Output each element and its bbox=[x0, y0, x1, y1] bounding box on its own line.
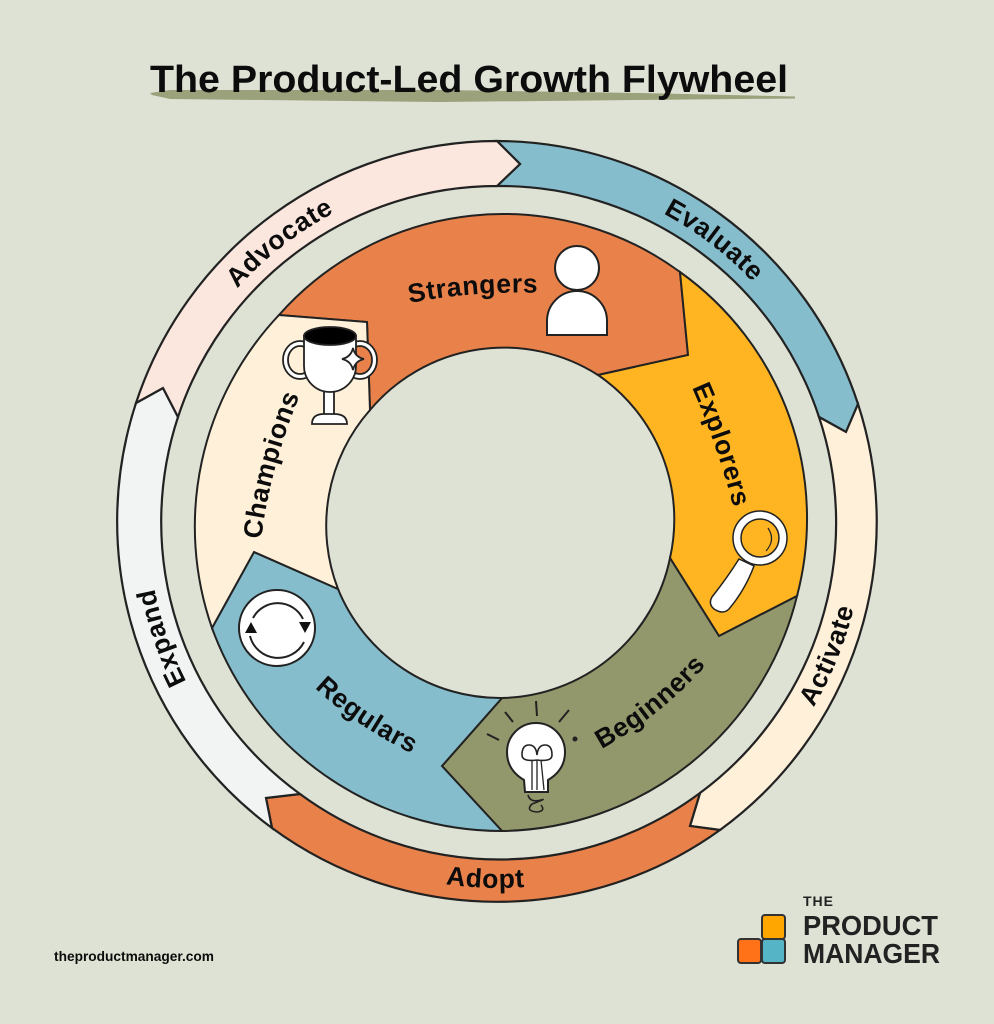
segment: Expand bbox=[117, 388, 300, 828]
logo wordmark: MANAGER bbox=[803, 938, 940, 969]
outer ring: lifecycle actions bbox=[117, 141, 877, 902]
logo wordmark: PRODUCT bbox=[803, 910, 938, 941]
label: Regulars: Regulars bbox=[316, 676, 416, 752]
icon: trophy bbox=[283, 327, 377, 424]
logo bbox=[738, 893, 940, 969]
icon: light bulb bbox=[487, 701, 578, 812]
segment: Champions bbox=[195, 315, 370, 628]
segment: Evaluate bbox=[497, 141, 858, 432]
icon: cycle arrows bbox=[239, 590, 315, 666]
title: The Product-Led Growth Flywheel bbox=[150, 59, 788, 101]
title brush underline bbox=[150, 90, 795, 102]
segment: Advocate bbox=[136, 141, 520, 417]
segment: Beginners bbox=[442, 558, 797, 831]
label: Expand: Expand bbox=[136, 590, 186, 688]
label: Strangers: Strangers bbox=[408, 278, 536, 302]
label: Activate: Activate bbox=[801, 607, 852, 707]
icon: magnifier bbox=[710, 511, 787, 612]
label: Explorers: Explorers bbox=[692, 382, 746, 506]
label: Evaluate: Evaluate bbox=[664, 198, 760, 280]
segment: Strangers bbox=[279, 214, 688, 410]
label: Advocate: Advocate bbox=[228, 202, 332, 288]
label: Beginners: Beginners bbox=[594, 658, 704, 748]
segment: Regulars bbox=[212, 552, 502, 831]
segment: Adopt bbox=[266, 793, 720, 902]
logo mark bbox=[738, 915, 785, 963]
logo wordmark: THE bbox=[803, 893, 833, 909]
segment: Explorers bbox=[598, 272, 807, 636]
label: Champions: Champions bbox=[244, 393, 298, 538]
logo wordmark bbox=[803, 893, 940, 969]
segment: Activate bbox=[690, 404, 877, 830]
footer website: theproductmanager.com bbox=[54, 949, 214, 964]
inner ring: user stages bbox=[195, 214, 807, 831]
icon: person bbox=[547, 246, 607, 335]
label: Adopt: Adopt bbox=[446, 867, 524, 894]
